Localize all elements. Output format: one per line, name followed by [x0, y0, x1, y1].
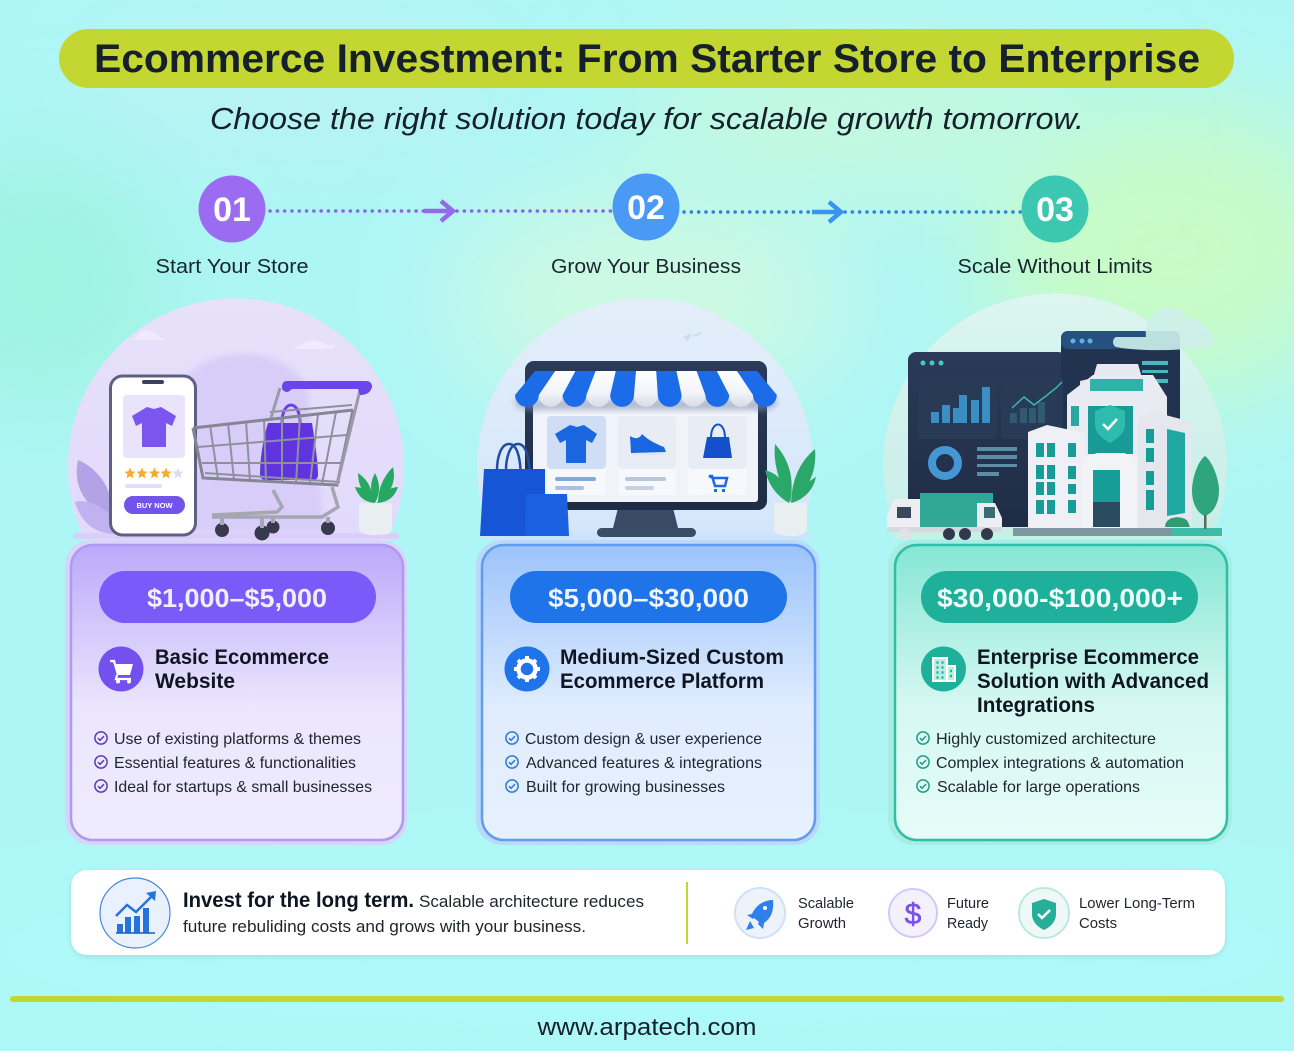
feature list: Complex integrations & automation	[936, 755, 1184, 772]
feature list: Essential features & functionalities	[114, 755, 356, 772]
step 1 marker: 01	[213, 191, 251, 229]
benefit: scalable growth: Growth	[798, 915, 846, 932]
callout text: future rebuliding costs and grows with your business.	[183, 917, 586, 936]
illustration: phone and shopping cart	[68, 298, 404, 540]
feature list: Ideal for startups & small businesses	[114, 779, 372, 796]
feature list	[95, 731, 372, 796]
plan title	[560, 646, 784, 693]
step 1 marker	[198, 176, 266, 242]
product tiles	[547, 416, 747, 495]
step 2 marker	[612, 174, 680, 240]
benefit: future ready	[889, 889, 989, 937]
step 3 label: Scale Without Limits	[958, 256, 1152, 278]
title banner	[59, 29, 1234, 88]
benefit: scalable growth: Scalable	[798, 895, 854, 912]
price pill	[99, 571, 376, 623]
feature list: Custom design & user experience	[525, 731, 762, 748]
panel: medium-sized custom ecommerce platform	[476, 540, 820, 845]
title banner: Ecommerce Investment: From Starter Store to Enterprise	[94, 37, 1200, 81]
benefit: lower long-term costs: Lower Long-Term	[1079, 895, 1195, 912]
benefit: future ready: $	[905, 898, 922, 931]
price pill	[510, 571, 787, 623]
icon: gear	[504, 646, 550, 692]
subtitle: Choose the right solution today for scalable growth tomorrow.	[210, 101, 1084, 136]
plan title: Basic Ecommerce	[155, 646, 329, 669]
illustration: online storefront monitor	[477, 298, 816, 539]
cloud	[1113, 307, 1214, 350]
icon: growth chart	[100, 878, 170, 948]
shopping cart	[193, 381, 372, 540]
panel: long-term investment callout	[71, 870, 1225, 957]
benefit: lower long-term costs	[1019, 888, 1195, 938]
callout text	[183, 889, 644, 936]
plan title	[155, 646, 329, 693]
footer url: www.arpatech.com	[536, 1014, 756, 1041]
arrow: step 1 to step 2	[270, 201, 612, 221]
striped awning	[515, 371, 777, 411]
feature list: Built for growing businesses	[526, 779, 725, 796]
feature list	[506, 731, 762, 796]
potted plant	[765, 444, 816, 536]
plan title: Medium-Sized Custom	[560, 646, 784, 669]
step 2 label: Grow Your Business	[551, 256, 741, 278]
plan title	[977, 646, 1209, 717]
potted plant	[355, 467, 398, 535]
benefit: future ready: Ready	[947, 915, 988, 932]
tree	[1165, 456, 1219, 529]
plan title: Website	[155, 670, 235, 693]
phone: BUY NOW	[136, 501, 173, 510]
dashboard panels	[908, 331, 1180, 527]
step 2 marker: 02	[627, 189, 665, 227]
plan title: Solution with Advanced	[977, 670, 1209, 693]
icon: office building	[921, 646, 966, 692]
shopping bags	[480, 444, 569, 536]
feature list: Scalable for large operations	[937, 779, 1140, 796]
icon: shopping cart	[98, 646, 144, 692]
plan title: Integrations	[977, 694, 1095, 717]
benefit: future ready: Future	[947, 895, 989, 912]
benefit: scalable growth	[735, 888, 854, 938]
step 3 marker	[1022, 176, 1088, 242]
feature list: Highly customized architecture	[936, 731, 1156, 748]
callout text: Invest for the long term.	[183, 889, 414, 912]
benefit: lower long-term costs: Costs	[1079, 915, 1117, 932]
office building	[1013, 364, 1222, 536]
arrow: step 2 to step 3	[684, 202, 1021, 222]
plan title: Ecommerce Platform	[560, 670, 764, 693]
feature list: Advanced features & integrations	[526, 755, 762, 772]
phone	[110, 376, 196, 535]
step 3 marker: 03	[1036, 191, 1074, 229]
feature list: Use of existing platforms & themes	[114, 731, 361, 748]
price pill: $1,000–$5,000	[147, 583, 327, 613]
step 1 label: Start Your Store	[156, 256, 308, 278]
plan title: Enterprise Ecommerce	[977, 646, 1199, 669]
callout text: Scalable architecture reduces	[419, 892, 644, 911]
price pill	[921, 571, 1198, 623]
panel: enterprise ecommerce solution	[888, 540, 1232, 845]
price pill: $30,000-$100,000+	[937, 583, 1183, 613]
illustration: enterprise building and dashboards	[883, 294, 1227, 540]
price pill: $5,000–$30,000	[548, 583, 749, 613]
delivery truck	[887, 493, 1002, 540]
feature list	[917, 731, 1184, 796]
panel: basic ecommerce website	[65, 540, 407, 845]
